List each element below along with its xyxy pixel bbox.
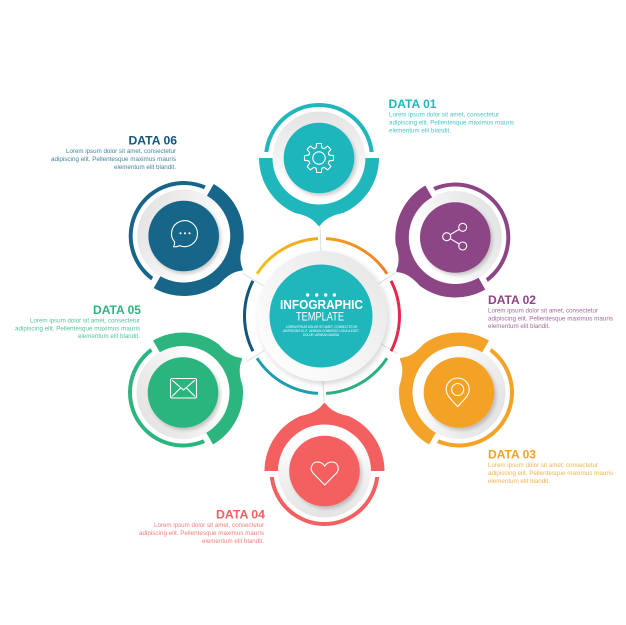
text block: data 04: DATA 04 <box>216 508 265 522</box>
central hub <box>245 239 399 393</box>
hub: small text: ADIPISCING ELIT. AENEAN COMMODO LIGULA EGET <box>283 329 360 333</box>
text block: data 02 <box>488 293 613 330</box>
icon: heart <box>311 462 338 485</box>
text block: data 06: Lorem ipsum dolor sit amet, consectetur <box>66 148 177 155</box>
text block: data 05: adipiscing elit. Pellentesque maximus mauris <box>15 325 140 332</box>
text block: data 04: Lorem ipsum dolor sit amet, consectetur <box>154 522 265 529</box>
text block: data 01 <box>388 97 514 134</box>
icon: chat bubble <box>172 221 198 247</box>
text block: data 06: elementum elit blandit. <box>114 164 176 171</box>
text block: data 06: adipiscing elit. Pellentesque maximus mauris <box>51 156 176 163</box>
hub: small text: DOLOR. AENEAN MASSA <box>303 333 340 337</box>
node 6: chat <box>106 157 273 322</box>
node 5: envelope <box>105 307 272 472</box>
icon: location pin <box>446 378 469 407</box>
hub: title: INFOGRAPHIC <box>280 297 364 312</box>
text block: data 04: elementum elit blandit. <box>202 538 264 545</box>
text block: data 03: DATA 03 <box>488 448 536 462</box>
text block: data 06 <box>51 134 177 171</box>
connector lines <box>242 226 398 403</box>
hub: small text <box>283 325 360 337</box>
text block: data 05: Lorem ipsum dolor sit amet, consectetur <box>30 318 141 324</box>
hub: small text: LOREM IPSUM DOLOR SIT AMET, CONSECTETUR <box>286 325 357 329</box>
text block: data 03: adipiscing elit. Pellentesque maximus mauris <box>488 470 613 477</box>
text block: data 02: elementum elit blandit. <box>488 323 550 330</box>
hub: dots <box>306 293 336 297</box>
icon: envelope <box>170 378 196 398</box>
hub: teal disc <box>270 264 372 368</box>
text block: data 06: DATA 06 <box>128 134 177 148</box>
icon: share <box>443 223 467 250</box>
text block: data 03: elementum elit blandit. <box>488 478 550 485</box>
text block: data 05: elementum elit blandit. <box>78 333 140 340</box>
text block: data 02: DATA 02 <box>488 293 536 307</box>
text block: data 05: DATA 05 <box>93 303 141 317</box>
text block: data 01: adipiscing elit. Pellentesque maximus mauris <box>389 120 514 126</box>
icon: gear <box>304 144 334 172</box>
text block: data 02: Lorem ipsum dolor sit amet, consectetur <box>488 308 599 314</box>
hub: white disc <box>257 251 387 381</box>
text block: data 02: adipiscing elit. Pellentesque maximus mauris <box>488 315 613 322</box>
text block: data 03: Lorem ipsum dolor sit amet, consectetur <box>488 462 599 469</box>
text block: data 04 <box>139 508 265 545</box>
text block: data 05 <box>15 303 141 340</box>
hub: subtitle: TEMPLATE <box>296 312 344 324</box>
node 3: pin <box>370 307 537 472</box>
text block: data 01: DATA 01 <box>388 97 437 111</box>
node 2: share <box>366 158 533 323</box>
text block: data 01: Lorem ipsum dolor sit amet, consectetur <box>389 112 500 119</box>
text block: data 01: elementum elit blandit. <box>389 127 451 134</box>
node 1: gear <box>259 103 379 226</box>
text block: data 03 <box>488 448 613 485</box>
hub: segmented colour ring <box>245 239 399 393</box>
text block: data 04: adipiscing elit. Pellentesque maximus mauris <box>139 530 264 537</box>
node 4: heart <box>264 403 384 526</box>
